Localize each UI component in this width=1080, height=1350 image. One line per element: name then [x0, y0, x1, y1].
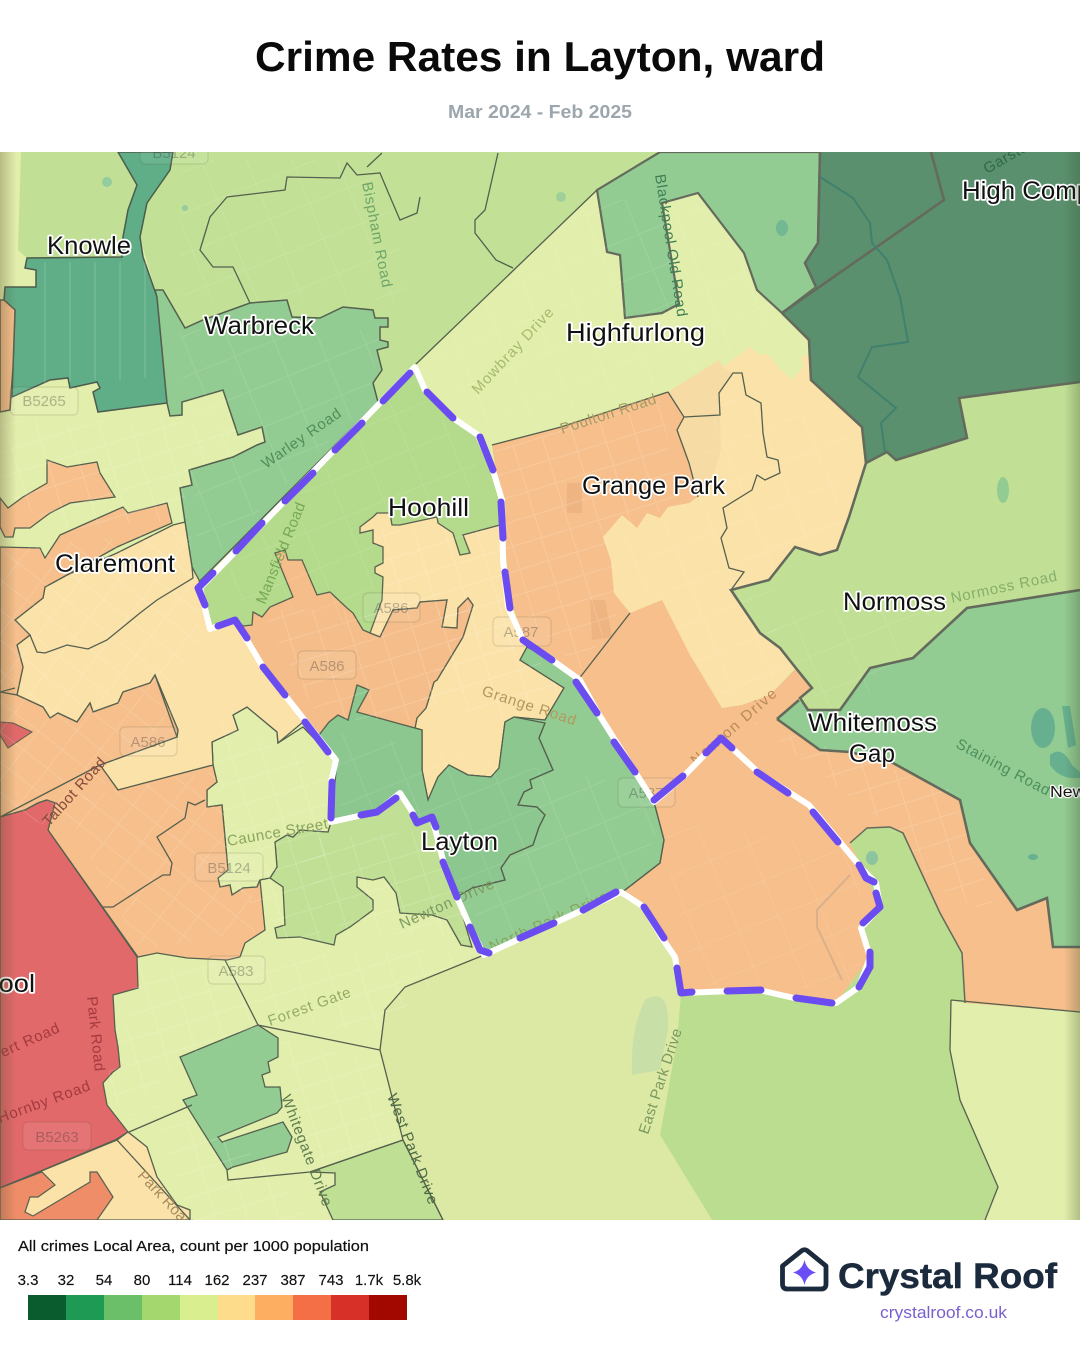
road labels: Blackpool Old Road — [651, 173, 690, 318]
area: Layton central green — [416, 647, 665, 950]
area: Hoohill light green — [198, 367, 502, 633]
road labels: Park Road — [134, 1167, 196, 1231]
place labels: Layton — [421, 828, 498, 856]
place labels: Claremont — [55, 550, 175, 578]
map base: pale green areas — [0, 152, 1080, 1220]
legend scale values: 743 — [318, 1272, 344, 1289]
area: Whitemoss mid green — [777, 590, 1080, 947]
road labels: Whitegate Drive — [277, 1092, 335, 1209]
area: south west salmon — [0, 1172, 113, 1220]
area: south west cream — [0, 1132, 190, 1220]
road labels: Park Road — [83, 996, 108, 1072]
area: Highfurlong mid green block — [597, 152, 820, 318]
area: northern light green neighbourhoods — [18, 152, 137, 258]
road shields: B5124 — [152, 145, 196, 162]
place labels: Warbreck — [204, 312, 315, 340]
road shields: A586 — [373, 600, 409, 617]
road labels: Newton Drive — [687, 685, 780, 769]
road shields: A586 — [309, 658, 345, 675]
road shields — [10, 140, 675, 1150]
place labels: Normoss — [843, 588, 946, 616]
road labels: North Park Drive — [487, 888, 611, 956]
area: Knowle dark green — [4, 152, 173, 412]
footpath in south east of ward — [817, 875, 850, 980]
area: central Blackpool red — [0, 800, 138, 1188]
legend scale values: 32 — [58, 1272, 74, 1289]
area: Bispham light green — [140, 152, 660, 402]
road shields: A587 — [628, 785, 664, 802]
area: Whitegate green block — [180, 1025, 292, 1170]
area: Grange Park darker cream patch upper — [668, 360, 733, 417]
road shields: A587 — [503, 624, 539, 641]
legend scale values: 162 — [204, 1272, 230, 1289]
legend scale values: 114 — [168, 1272, 192, 1289]
legend scale values — [18, 1272, 422, 1289]
legend — [18, 1239, 422, 1320]
place labels: Whitemoss — [808, 709, 937, 737]
road labels: Warley Road — [259, 405, 344, 472]
road labels: West Park Drive — [383, 1091, 441, 1207]
road labels: Mowbray Drive — [468, 304, 557, 398]
road shields: A586 — [130, 734, 166, 751]
subtitle: date range: Mar 2024 - Feb 2025 — [448, 102, 632, 122]
area: Claremont cream — [15, 522, 303, 790]
area: Hoohill cream — [360, 513, 564, 800]
area: Grange Park orange — [492, 392, 698, 680]
area: Claremont upper orange patch — [0, 460, 115, 537]
area: Normoss light green — [731, 382, 1080, 710]
place labels: Gap — [849, 740, 895, 768]
road labels: Normoss Road — [949, 568, 1058, 607]
area: left orange sliver — [0, 300, 15, 412]
Layton ward boundary: purple dashes — [198, 373, 880, 1003]
legend scale values: 3.3 — [18, 1272, 38, 1289]
place labels: Knowle — [47, 232, 131, 260]
stream in dark green area — [820, 177, 908, 452]
legend scale values: 5.8k — [393, 1272, 422, 1289]
road labels: Staining Road — [953, 736, 1053, 799]
area: High Compton very dark green — [782, 152, 1080, 463]
legend scale values: 237 — [242, 1272, 268, 1289]
road labels: Poulton Road — [558, 391, 658, 438]
icon: house with star — [782, 1250, 826, 1289]
thick north east boundaries — [731, 152, 1080, 1003]
road labels: East Park Drive — [636, 1026, 686, 1136]
road labels: Forest Gate — [266, 984, 353, 1030]
area: Warbreck mid green — [155, 290, 388, 582]
road labels: Talbot Road — [39, 754, 110, 830]
area: Caunce Street pale green — [207, 707, 337, 895]
area: Hoohill south orange — [235, 550, 473, 735]
legend scale values: 54 — [96, 1272, 112, 1289]
brand name: Crystal Roof — [838, 1257, 1057, 1296]
road shields: B5124 — [207, 860, 251, 877]
area: Claremont west orange — [0, 503, 172, 695]
boundary lines — [0, 153, 1080, 1220]
legend scale values: 1.7k — [355, 1272, 384, 1289]
place labels: Hoohill — [388, 494, 469, 522]
legend scale values: 80 — [134, 1272, 150, 1289]
road shields: B5263 — [35, 1129, 79, 1146]
area: Grange Park darker building patches — [567, 483, 612, 640]
area: West Park light green — [310, 1140, 443, 1220]
street grids — [0, 160, 1000, 1220]
road labels: Newton Drive — [397, 876, 497, 933]
area: Grange Park east cream — [603, 347, 866, 708]
area: south park pale green — [380, 892, 712, 1220]
area: Talbot Road orange — [0, 675, 265, 960]
legend colour swatches — [28, 1295, 407, 1320]
road labels: Caunce Street — [226, 815, 330, 850]
water bodies — [102, 177, 1080, 1075]
brand logo — [782, 1250, 1057, 1322]
place labels — [0, 177, 1080, 998]
Layton ward boundary: white base line — [200, 367, 880, 1003]
area: Layton south west light green — [270, 793, 472, 947]
area: Layton darker green — [338, 686, 554, 896]
title: Crime Rates in Layton, ward — [255, 33, 825, 80]
place labels: Grange Park — [582, 472, 725, 500]
legend scale values: 387 — [280, 1272, 306, 1289]
map edge shading — [0, 152, 1080, 1220]
road labels: Grange Road — [480, 683, 578, 729]
place labels: Highfurlong — [566, 319, 705, 347]
area: east park green — [660, 827, 998, 1220]
area: east orange band and Layton south east — [578, 600, 1080, 1012]
road labels: Bispham Road — [358, 181, 395, 289]
road labels: Mansfield Road — [253, 500, 309, 606]
brand url: crystalroof.co.uk — [880, 1304, 1008, 1322]
road shields: A583 — [218, 963, 254, 980]
road shields: B5265 — [22, 393, 66, 410]
area: small red blob — [0, 722, 32, 748]
area: Grange Park darker cream patch lower — [677, 415, 721, 497]
legend title: All crimes Local Area, count per 1000 population — [18, 1239, 369, 1255]
